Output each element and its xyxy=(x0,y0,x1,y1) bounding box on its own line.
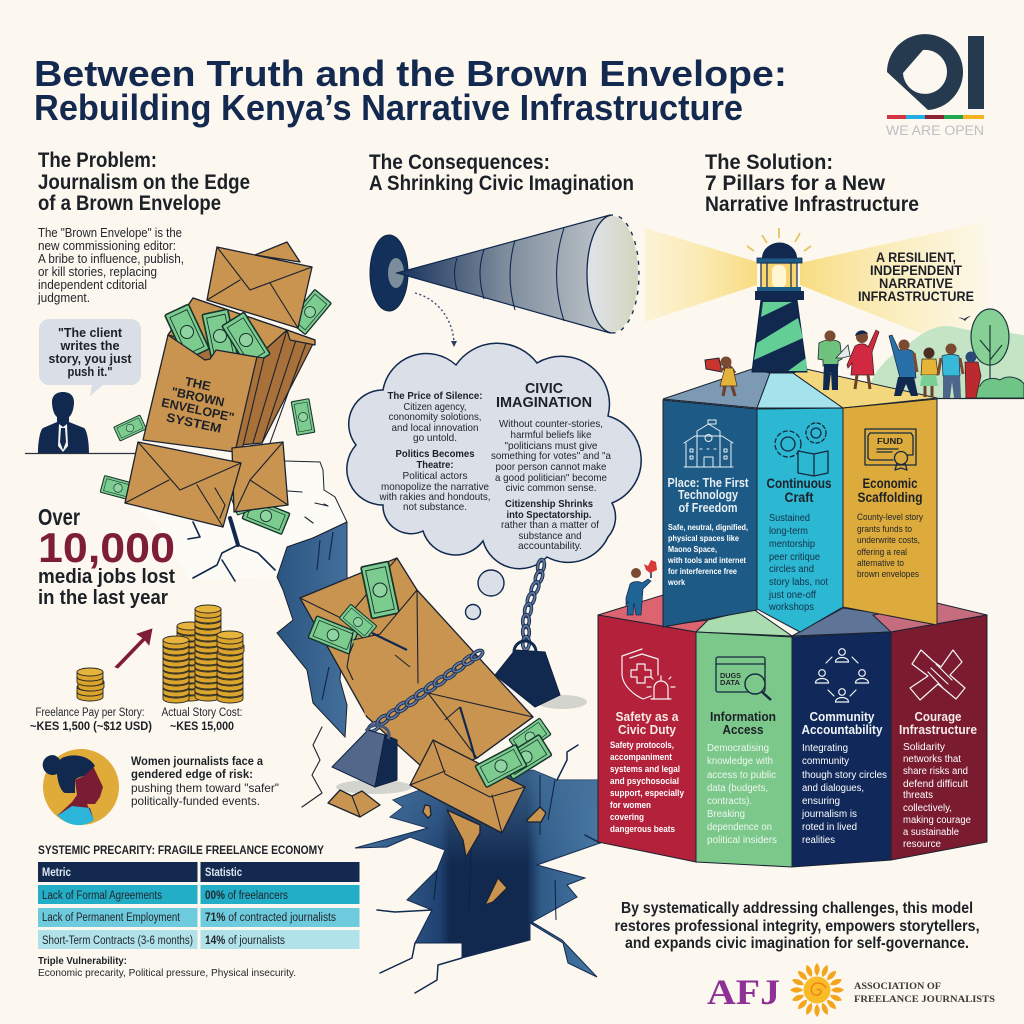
pillar: continuous craft: peer critique xyxy=(769,552,820,563)
stat: media jobs lost: in the last year xyxy=(38,587,168,609)
table: systemic precarity: SYSTEMIC PRECARITY: FRAGILE FREELANCE ECONOMY xyxy=(38,843,324,857)
text: brown envelope definition: The "Brown Envelope" is the xyxy=(38,225,182,240)
speech bubble: client quote: story, you just xyxy=(48,352,132,366)
heading: The Problem: Journalism on the Edge xyxy=(38,171,250,194)
cloud left column: Citizen agency, xyxy=(404,401,466,413)
front bag: THE xyxy=(184,375,212,394)
person: woman in red dress xyxy=(847,330,879,389)
pillar: information access: knowledge with xyxy=(707,756,773,767)
table: systemic precarity xyxy=(38,843,360,949)
icon: lighthouse xyxy=(747,228,811,372)
cracks under the envelope stack xyxy=(188,518,275,581)
heading: The Solution: The Solution: xyxy=(705,151,833,174)
icon: telescope xyxy=(370,215,639,333)
heading: The Consequences: A Shrinking Civic Imagination xyxy=(369,172,634,195)
cloud left column: with rakies and hondouts, xyxy=(379,491,490,503)
thought bubbles xyxy=(466,570,504,620)
cloud: civic imagination xyxy=(347,343,641,569)
table: systemic precarity: Metric xyxy=(42,867,72,879)
front bag: ENVELOPE" xyxy=(160,396,236,425)
pillar: information access: contracts). xyxy=(707,796,752,807)
cash from falling envelope xyxy=(475,718,552,788)
pillar: information access: Access xyxy=(722,722,764,737)
text: triple vulnerability: Economic precarity, Political pressure, Physical insecurity. xyxy=(38,967,296,979)
speech bubble: client quote: "The client xyxy=(58,326,123,340)
pillar: information access: dependence on xyxy=(707,822,772,833)
pillar: place: for interference free xyxy=(668,566,737,576)
heading: The Problem: The Problem: xyxy=(38,149,157,172)
pillar: economic scaffolding: grants funds to xyxy=(857,524,912,535)
pillar: courage infrastructure: networks that xyxy=(903,754,961,765)
person: girl in yellow xyxy=(920,348,938,397)
pillar: safety as a civic duty: Safety protocols, xyxy=(610,740,674,751)
person: woman with red scarf xyxy=(965,352,981,398)
front bag xyxy=(143,335,264,452)
text: brown envelope definition: or kill stories, replacing xyxy=(38,264,157,279)
pillar: continuous craft: story labs, not xyxy=(769,577,828,588)
heading: The Problem: of a Brown Envelope xyxy=(38,192,221,215)
light beams xyxy=(645,222,990,345)
illustration: small falling envelope xyxy=(410,740,525,833)
pillar: place: of Freedom xyxy=(678,501,738,515)
heading: The Consequences: The Consequences: xyxy=(369,151,550,174)
pillar: economic scaffolding: FUND xyxy=(877,437,903,446)
pillar: economic scaffolding: brown envelopes xyxy=(857,569,919,580)
stat: media jobs lost: 10,000 xyxy=(38,524,175,571)
stat: media jobs lost: media jobs lost xyxy=(38,566,175,588)
cash in envelope xyxy=(165,304,270,368)
cloud left column: Theatre: xyxy=(416,459,454,471)
pillar: information access: Democratising xyxy=(707,743,769,754)
back envelopes xyxy=(168,242,315,445)
cloud right column: Without counter-stories, xyxy=(499,418,603,430)
pillar: information access: access to public xyxy=(707,770,776,781)
pillar: economic scaffolding xyxy=(843,399,937,625)
heading: The Consequences xyxy=(369,151,634,195)
pillar: continuous craft xyxy=(757,408,843,632)
pillar: place: Safe, neutral, dignified, xyxy=(668,522,748,532)
text: brown envelope definition: judgment. xyxy=(37,290,90,305)
pillar: courage infrastructure: resource xyxy=(903,839,942,850)
heading: The Solution: 7 Pillars for a New xyxy=(705,172,886,195)
person: man in cyan xyxy=(938,344,963,398)
logo: AFJ sun xyxy=(790,963,844,1017)
stat: media jobs lost: Over xyxy=(38,504,80,530)
pillar: continuous craft: mentorship xyxy=(769,539,815,550)
pillar: community accountability: and dialogues, xyxy=(802,783,864,794)
conclusion text xyxy=(614,900,980,952)
text: freelance pay: Freelance Pay per Story: xyxy=(36,707,144,719)
top envelope xyxy=(207,247,312,328)
cloud right column: rather than a matter of xyxy=(501,519,599,531)
cloud right column: something for votes" and "a xyxy=(491,450,611,462)
pillar: information access xyxy=(696,632,792,867)
pit in the ground xyxy=(355,745,600,993)
pillar: courage infrastructure: a sustainable xyxy=(903,827,960,838)
pillar: courage infrastructure xyxy=(891,615,987,860)
table: systemic precarity: 00% of freelancers xyxy=(205,890,288,902)
pillar: continuous craft: workshops xyxy=(768,602,814,613)
table: systemic precarity: Lack of Permanent Employment xyxy=(42,912,181,924)
dotted arrow to cloud xyxy=(415,293,457,347)
text: brown envelope definition: independent cditorial xyxy=(38,277,147,292)
cloud right column: accountability. xyxy=(518,540,582,552)
logo: We Are Open xyxy=(886,34,984,138)
icon: small coin stack xyxy=(77,668,104,701)
pillar: community accountability: Integrating xyxy=(802,743,848,754)
pillar: safety as a civic duty: Safety as a xyxy=(616,709,679,724)
pillar: information access: Information xyxy=(710,709,776,724)
text: freelance pay xyxy=(30,707,152,733)
pillar: place: with tools and internet xyxy=(667,555,746,565)
landscape: hills and trees xyxy=(865,309,1024,398)
pillar: community accountability: journalism is xyxy=(801,809,857,820)
table: systemic precarity: Short-Term Contracts (3-6 months) xyxy=(42,935,193,947)
text: resilient infrastructure: NARRATIVE xyxy=(879,276,953,291)
cloud left column: not substance. xyxy=(403,501,467,513)
pillar: continuous craft: circles and xyxy=(769,564,814,575)
people on the platform xyxy=(626,316,981,615)
weight shadows xyxy=(336,695,587,794)
pillar: continuous craft: long-term xyxy=(769,526,808,537)
text: gendered risk: gendered edge of risk: xyxy=(131,767,253,781)
pillar: place xyxy=(663,400,757,627)
text: resilient infrastructure: A RESILIENT, xyxy=(876,250,956,265)
pillar: courage infrastructure: share risks and xyxy=(903,766,968,777)
speech bubble: client quote xyxy=(39,319,141,396)
cloud right column: poor person cannot make xyxy=(496,461,607,473)
cloud left column: Political actors xyxy=(402,470,468,482)
pillar: community accountability: community xyxy=(802,756,849,767)
tier top surface xyxy=(663,369,937,408)
text: Association of Freelance Journalists: FREELANCE JOURNALISTS xyxy=(854,995,995,1005)
cloud right column: harmful beliefs like xyxy=(510,429,592,441)
pillar: safety as a civic duty: and psychosocial xyxy=(610,776,679,787)
icon: large coin stacks xyxy=(163,605,244,703)
chain: envelope to weight xyxy=(367,649,484,733)
text: gendered risk xyxy=(131,754,279,808)
bottom right envelope xyxy=(232,442,288,512)
heading: The Solution xyxy=(705,151,919,216)
text: gendered risk: politically-funded events. xyxy=(131,794,260,808)
icon: suited man silhouette xyxy=(25,392,135,454)
title xyxy=(34,53,787,128)
person: man with clipboard xyxy=(818,330,850,390)
text: freelance pay: ~KES 1,500 (~$12 USD) xyxy=(30,719,152,733)
cloud right column: a good politician" become xyxy=(495,472,607,484)
pillar: continuous craft: Craft xyxy=(784,490,814,505)
speech bubble: client quote: writes the xyxy=(59,339,120,353)
cliff top edge xyxy=(123,453,347,580)
cloud right column: CIVIC xyxy=(525,380,563,397)
pillar: safety as a civic duty xyxy=(598,615,696,862)
pillar: place: Technology xyxy=(678,488,738,502)
illustration: falling cracked envelope xyxy=(300,558,533,777)
pillar: community accountability: though story circles xyxy=(802,770,887,781)
cloud right column: into Spectatorship. xyxy=(506,509,592,521)
pillar: continuous craft: Sustained xyxy=(769,513,810,524)
pillar: information access: DATA xyxy=(720,680,740,687)
icon: right weight xyxy=(495,641,560,707)
pillar: economic scaffolding: County-level story xyxy=(857,512,923,523)
pillar: community accountability: roted in lived xyxy=(802,822,857,833)
stat: media jobs lost xyxy=(38,504,175,609)
pillar: economic scaffolding: underwrite costs, xyxy=(857,535,920,546)
text: Association of Freelance Journalists xyxy=(854,982,995,1005)
cloud left column xyxy=(379,390,490,513)
text: actual story cost xyxy=(162,707,242,733)
pillar: safety as a civic duty: accompaniment xyxy=(610,752,673,763)
text: brown envelope definition: new commissioning editor: xyxy=(38,238,176,253)
text: gendered risk: pushing them toward "safer" xyxy=(131,781,279,795)
cloud left column: cononomity solotions, xyxy=(388,411,482,423)
pillar: economic scaffolding: Scaffolding xyxy=(858,490,922,505)
pillar: information access: Breaking xyxy=(707,809,745,820)
text: triple vulnerability: Triple Vulnerability: xyxy=(38,955,127,967)
arrow: pay gap xyxy=(115,629,152,668)
pillar: safety as a civic duty: dangerous beats xyxy=(610,824,675,835)
pillar: courage infrastructure: collectively, xyxy=(903,803,952,814)
heading: The Problem xyxy=(38,149,250,215)
speech bubble: client quote: push it." xyxy=(68,365,113,379)
pillar: economic scaffolding: Economic xyxy=(862,476,918,491)
text: resilient infrastructure xyxy=(858,250,974,304)
front bag: SYSTEM xyxy=(165,410,223,436)
cloud right column: civic common sense. xyxy=(506,482,596,494)
logo: We Are Open: WE ARE OPEN xyxy=(886,123,984,138)
pillar: courage infrastructure: Courage xyxy=(914,709,962,724)
loose cash xyxy=(100,289,331,534)
pillar: courage infrastructure: defend difficult xyxy=(903,779,968,790)
icon: left weight xyxy=(332,725,397,787)
conclusion text: and expands civic imagination for self-governance. xyxy=(625,935,969,952)
pillar: community accountability xyxy=(792,632,891,867)
pillar: community accountability: realities xyxy=(802,835,835,846)
cloud right column: IMAGINATION xyxy=(496,394,592,411)
illustration: brown envelope system stack xyxy=(100,242,331,534)
person: man waving xyxy=(889,335,918,396)
pillar: information access: political insiders xyxy=(707,835,777,846)
table: systemic precarity: 14% of journalists xyxy=(205,935,285,947)
pillar: safety as a civic duty: Civic Duty xyxy=(618,722,677,737)
pillar: place: Place: The First xyxy=(668,476,749,490)
table: systemic precarity: Lack of Formal Agreements xyxy=(42,890,162,902)
person: girl with megaphone xyxy=(705,356,737,396)
icon: bird xyxy=(958,316,971,321)
text: triple vulnerability xyxy=(38,955,296,979)
pillar: continuous craft: just one-off xyxy=(768,590,816,601)
icon: woman journalist xyxy=(43,749,119,825)
pillar: place: work xyxy=(667,577,685,587)
upper tier xyxy=(663,369,937,632)
text: brown envelope definition xyxy=(37,225,184,305)
front bag: "BROWN xyxy=(170,385,226,410)
pillar: information access: data (budgets, xyxy=(707,783,768,794)
text: gendered risk: Women journalists face a xyxy=(131,754,263,768)
text: resilient infrastructure: INFRASTRUCTURE xyxy=(858,289,974,304)
cloud left column: monopolize the narrative xyxy=(381,481,489,493)
logo: AFJ wordmark: AFJ xyxy=(707,972,780,1012)
text: actual story cost: ~KES 15,000 xyxy=(170,719,234,733)
cloud right column: "politicians must give xyxy=(504,440,598,452)
pillar: place: Maono Space, xyxy=(668,544,717,554)
title: Rebuilding Kenya’s Narrative Infrastructure xyxy=(34,87,743,128)
cloud right column: substance and xyxy=(518,530,582,542)
pillar: courage infrastructure: threats xyxy=(903,790,933,801)
text: Association of Freelance Journalists: ASSOCIATION OF xyxy=(854,982,941,992)
cloud right column xyxy=(491,380,611,552)
pillar: courage infrastructure: Solidarity xyxy=(903,742,945,753)
pillar: community accountability: Community xyxy=(810,709,875,724)
table: systemic precarity: Statistic xyxy=(205,867,242,879)
text: actual story cost: Actual Story Cost: xyxy=(162,707,242,719)
pillar: safety as a civic duty: for women xyxy=(610,800,651,811)
pillar: safety as a civic duty: systems and legal xyxy=(610,764,680,775)
bottom front envelope xyxy=(125,442,241,527)
pillar: economic scaffolding: alternative to xyxy=(857,558,904,569)
tier top surface xyxy=(598,595,987,636)
cloud right column: Citizenship Shrinks xyxy=(505,498,593,510)
cloud left column: The Price of Silence: xyxy=(388,390,482,402)
pillar: safety as a civic duty: support, especially xyxy=(610,788,685,799)
person: activist with flag xyxy=(626,560,657,615)
pillar: continuous craft: Continuous xyxy=(766,476,832,491)
cliff face xyxy=(277,522,347,807)
text: resilient infrastructure: INDEPENDENT xyxy=(870,263,963,278)
pillar: safety as a civic duty: covering xyxy=(610,812,644,823)
pillar: courage infrastructure: Infrastructure xyxy=(899,722,977,737)
pillar: community accountability: ensuring xyxy=(802,796,840,807)
pillar: information access: DUGS xyxy=(720,673,741,680)
table: systemic precarity: 71% of contracted journalists xyxy=(205,912,336,924)
pillar: economic scaffolding: offering a real xyxy=(857,547,907,558)
cloud left column: Politics Becomes xyxy=(396,448,475,460)
heading: The Solution: Narrative Infrastructure xyxy=(705,193,919,216)
cloud left column: go untold. xyxy=(413,432,457,444)
chain: cloud to weight xyxy=(522,559,545,650)
cloud left column: and local innovation xyxy=(392,422,479,434)
pillar: courage infrastructure: making courage xyxy=(903,815,972,826)
text: brown envelope definition: A bribe to influence, publish, xyxy=(38,251,184,266)
lower tier xyxy=(598,595,987,867)
pillar: place: physical spaces like xyxy=(668,533,739,543)
icon: rock fragments xyxy=(328,790,546,905)
conclusion text: By systematically addressing challenges, this model xyxy=(621,900,973,917)
pillar: community accountability: Accountability xyxy=(802,722,883,737)
conclusion text: restores professional integrity, empowers storytellers, xyxy=(614,918,980,935)
title: Between Truth and the Brown Envelope: xyxy=(34,53,787,94)
